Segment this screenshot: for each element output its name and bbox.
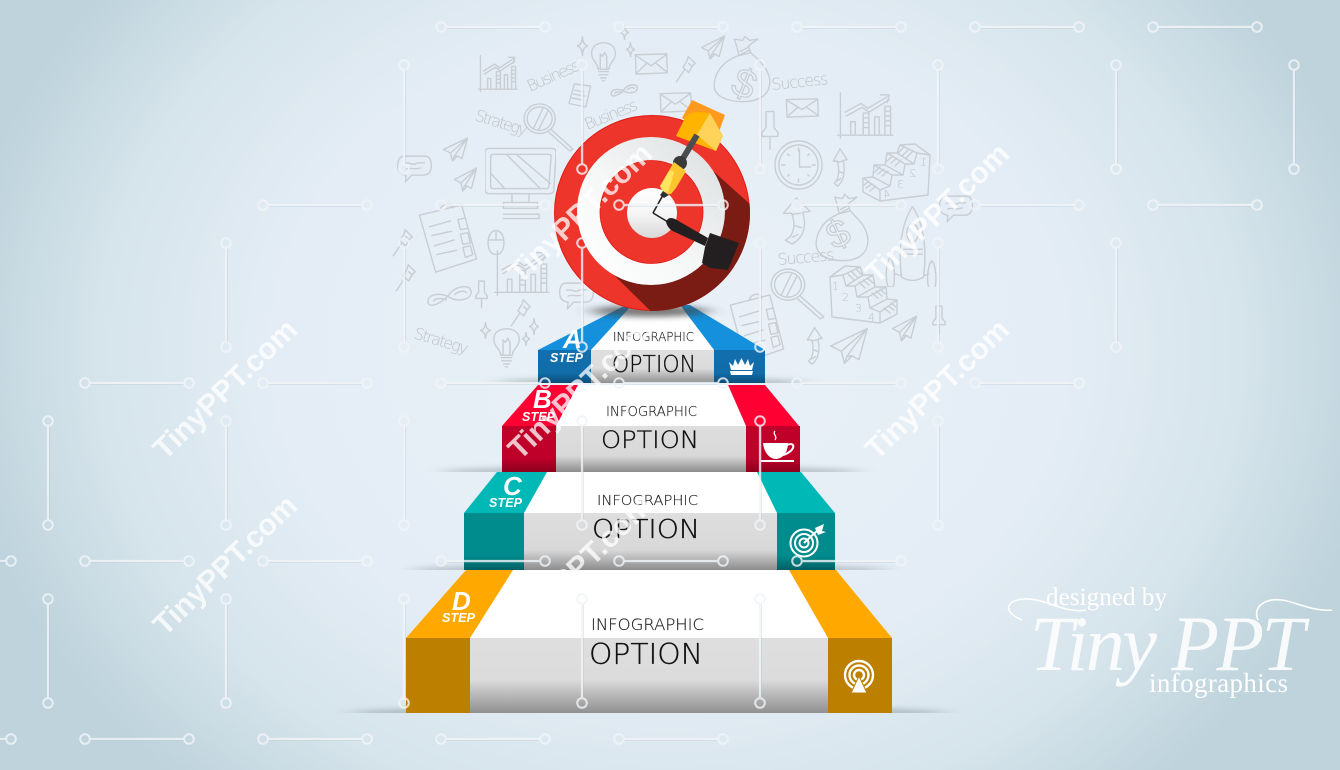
doodle word: Business: Business — [524, 56, 583, 96]
step C top surface — [464, 472, 835, 513]
step C option label: OPTION — [592, 515, 700, 545]
doodle dollar sign upper: $ — [726, 60, 763, 109]
step D front right — [828, 638, 892, 713]
floor shadows beside the steps — [349, 377, 949, 720]
step A letter: A — [562, 324, 582, 354]
step C white band — [524, 472, 777, 513]
step B letter: B — [533, 384, 552, 414]
dart: orange and yellow — [653, 100, 725, 213]
step A step label: STEP — [550, 351, 584, 365]
step B infographic label: INFOGRAPHIC — [606, 405, 697, 420]
step B option label: OPTION — [601, 426, 699, 454]
dart tip — [660, 191, 669, 198]
doodle sketch cloud behind the target — [393, 25, 972, 367]
icon: crown — [729, 358, 754, 375]
dart barrel — [660, 162, 686, 194]
step A front left — [538, 350, 591, 383]
step C front right — [777, 513, 835, 570]
outer red disc — [554, 116, 750, 310]
step D front centre — [470, 638, 828, 713]
target bullseye — [554, 115, 750, 311]
doodle word: Strategy: Strategy — [473, 106, 530, 140]
icon: target with arrow — [790, 524, 826, 556]
step A front centre — [591, 350, 714, 383]
step B front left — [502, 426, 556, 472]
doodle stair numbers upper: 3 — [897, 178, 904, 191]
watermark: centre lower: TinyPPT.com — [502, 489, 659, 642]
doodle word: Strategy second: Strategy — [412, 324, 471, 358]
doodle stair numbers upper: 2 — [909, 167, 916, 180]
doodle dollar sign lower: $ — [820, 211, 857, 258]
logo flourishes — [1009, 599, 1332, 620]
step C step label: STEP — [489, 496, 523, 510]
step B red — [502, 384, 800, 472]
step D option label: OPTION — [589, 638, 703, 671]
step D white band — [470, 570, 828, 638]
step A top surface right wedge — [680, 305, 765, 350]
doodle stair numbers upper: 1 — [920, 156, 927, 169]
watermark: right lower: TinyPPT.com — [859, 313, 1016, 466]
icon: broadcast antenna — [845, 661, 873, 693]
step C infographic label: INFOGRAPHIC — [597, 493, 698, 509]
doodle stair numbers upper: 4 — [883, 188, 890, 201]
step A top surface left wedge — [538, 307, 632, 350]
watermark: centre upper: TinyPPT.com — [502, 137, 659, 290]
step B white band — [556, 385, 746, 426]
watermark: left lower: TinyPPT.com — [147, 489, 304, 642]
step B top surface — [502, 385, 799, 426]
centre circle — [627, 188, 677, 238]
step A option label: OPTION — [612, 351, 696, 378]
step D infographic label: INFOGRAPHIC — [591, 615, 704, 634]
dart: black — [653, 213, 739, 270]
dart shaft — [682, 135, 697, 160]
step C front centre — [524, 513, 777, 570]
logo script name: Tiny PPT — [1030, 600, 1310, 687]
doodle stair numbers lower: 4 — [868, 311, 875, 324]
step A blue — [538, 305, 765, 383]
doodle stair numbers upper — [883, 156, 927, 201]
inner red ring — [600, 160, 703, 264]
doodle stair numbers lower — [832, 280, 875, 324]
step A infographic label: INFOGRAPHIC — [613, 329, 694, 344]
designer logo — [1009, 584, 1332, 698]
logo caption bottom: infographics — [1149, 668, 1288, 698]
step B front right — [746, 426, 800, 472]
step B front centre — [556, 426, 746, 472]
watermark: centre middle: TinyPPT.com — [502, 313, 659, 466]
doodle stair numbers lower: 1 — [832, 280, 839, 293]
step D letter: D — [452, 586, 471, 616]
step C teal — [464, 471, 835, 570]
doodle word: Success: Success — [770, 69, 829, 94]
watermark: left upper: TinyPPT.com — [147, 313, 304, 466]
logo caption top: designed by — [1046, 584, 1168, 611]
step B step label: STEP — [522, 410, 556, 424]
step A white band — [591, 305, 714, 350]
doodle stair numbers lower: 3 — [855, 302, 862, 315]
target contact shadow — [592, 305, 708, 317]
step D orange — [406, 570, 892, 713]
watermark: right upper: TinyPPT.com — [859, 137, 1016, 290]
doodle stair numbers lower: 2 — [842, 291, 849, 304]
step D step label: STEP — [442, 611, 476, 625]
doodle word: Success second: Success — [777, 245, 835, 269]
dart flight — [682, 100, 725, 140]
step C letter: C — [503, 471, 523, 501]
step A front right — [714, 350, 765, 383]
doodle word: Business second: Business — [581, 95, 640, 134]
step C front left — [464, 513, 524, 570]
long drop shadow — [614, 171, 750, 311]
white ring — [577, 137, 725, 285]
icon: coffee cup — [761, 431, 794, 461]
step D front left — [406, 638, 470, 713]
step D top surface — [406, 570, 892, 638]
